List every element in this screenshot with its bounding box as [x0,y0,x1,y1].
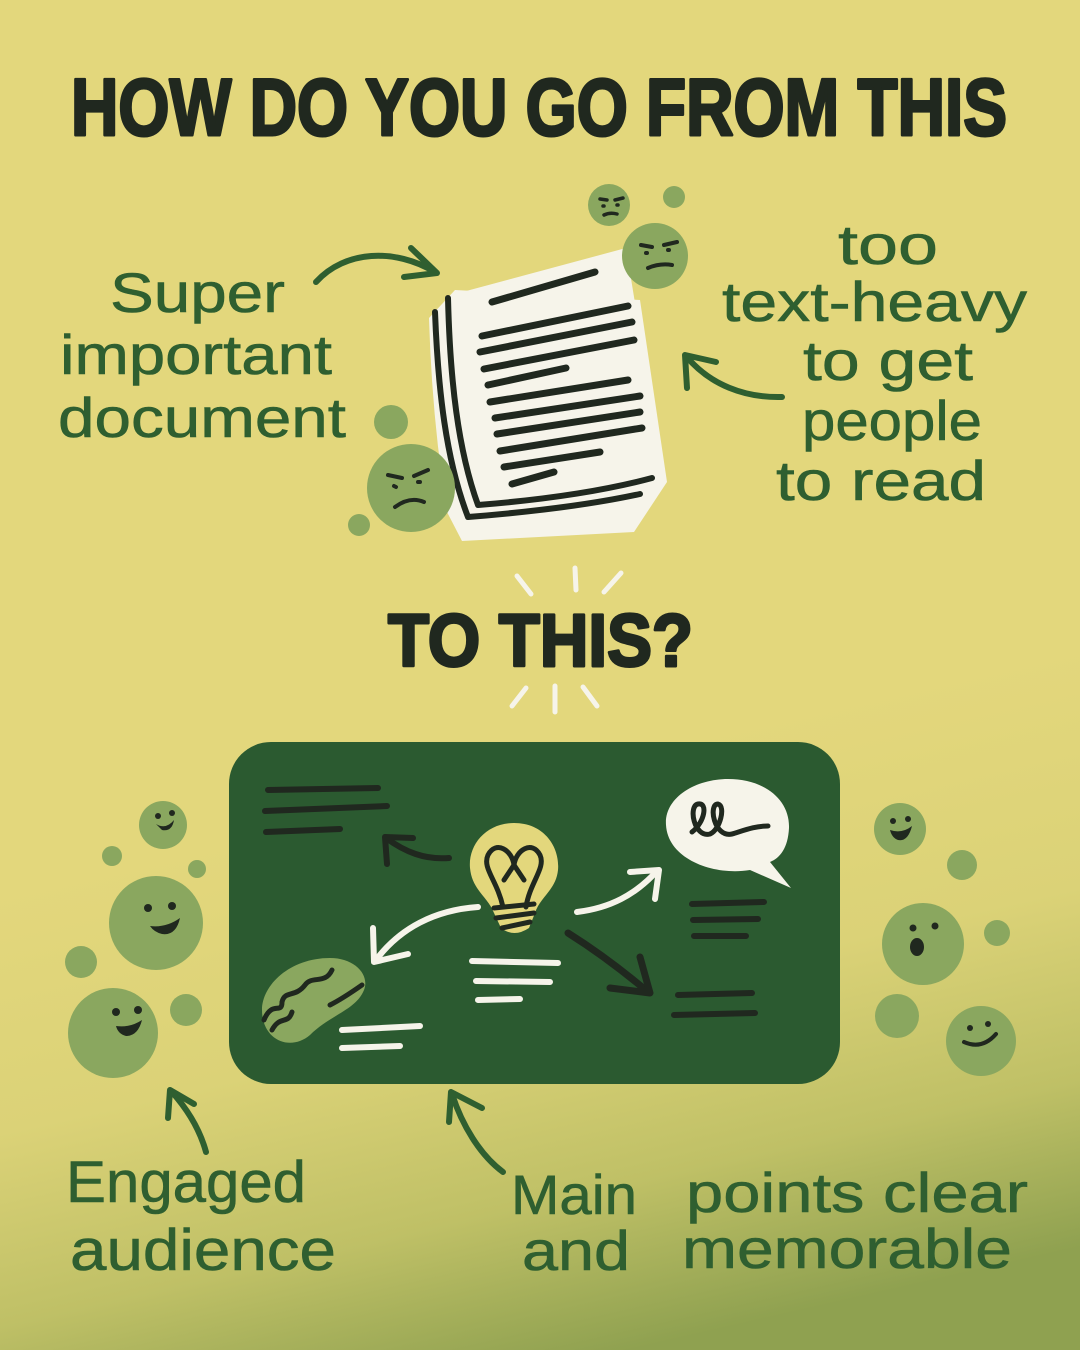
text lines under brain [342,1026,420,1048]
label: too text-heavy to get people to read: to get [803,329,974,392]
label: super important document: Super [110,261,285,324]
icon: brain blob [262,958,365,1043]
label: too text-heavy to get people to read: people [802,389,982,452]
icon: grumpy face right of document [622,223,688,289]
label: engaged audience [66,1150,336,1283]
label: main points clear and memorable [511,1161,1028,1282]
icon: small grumpy face top [588,184,685,226]
icon: happy faces left [65,801,206,1078]
arrow: to engaged audience [168,1090,206,1152]
label: main points clear and memorable: points clear [686,1161,1028,1224]
label: super important document: important [60,323,333,386]
label: main points clear and memorable: and [522,1219,630,1282]
label: engaged audience: Engaged [66,1150,306,1215]
title: to this: TO THIS? [388,599,693,682]
arrow: to document [316,248,437,282]
arrow: to top left lines [385,837,449,864]
label: too text-heavy to get people to read: to read [776,449,986,512]
text lines top left [265,788,387,832]
arrow: to board [449,1092,503,1172]
icon: happy faces right [874,803,1016,1076]
label: super important document: document [58,386,347,449]
label: too text-heavy to get people to read [722,213,1027,512]
label: too text-heavy to get people to read: too [838,213,938,276]
label: super important document [58,261,347,449]
icon: speech bubble [666,779,791,888]
icon: grumpy face lower left [348,405,455,536]
arrow: to bottom right lines [568,933,650,993]
label: engaged audience: audience [70,1218,336,1283]
text lines under bulb [472,961,558,1000]
icon: stacked document pages [429,248,667,541]
label: main points clear and memorable: Main [511,1163,637,1226]
arrow: to document from right [685,355,782,397]
arrow: to speech bubble [577,870,659,912]
icon: lightbulb [470,823,558,933]
decorative sparkle lines [512,568,621,712]
label: too text-heavy to get people to read: text-heavy [722,270,1027,333]
text lines bottom right [674,993,755,1015]
text lines under bubble [692,902,764,936]
panel: green board [229,742,840,1084]
label: main points clear and memorable: memorable [682,1217,1012,1280]
arrow: to brain shape [373,907,478,962]
